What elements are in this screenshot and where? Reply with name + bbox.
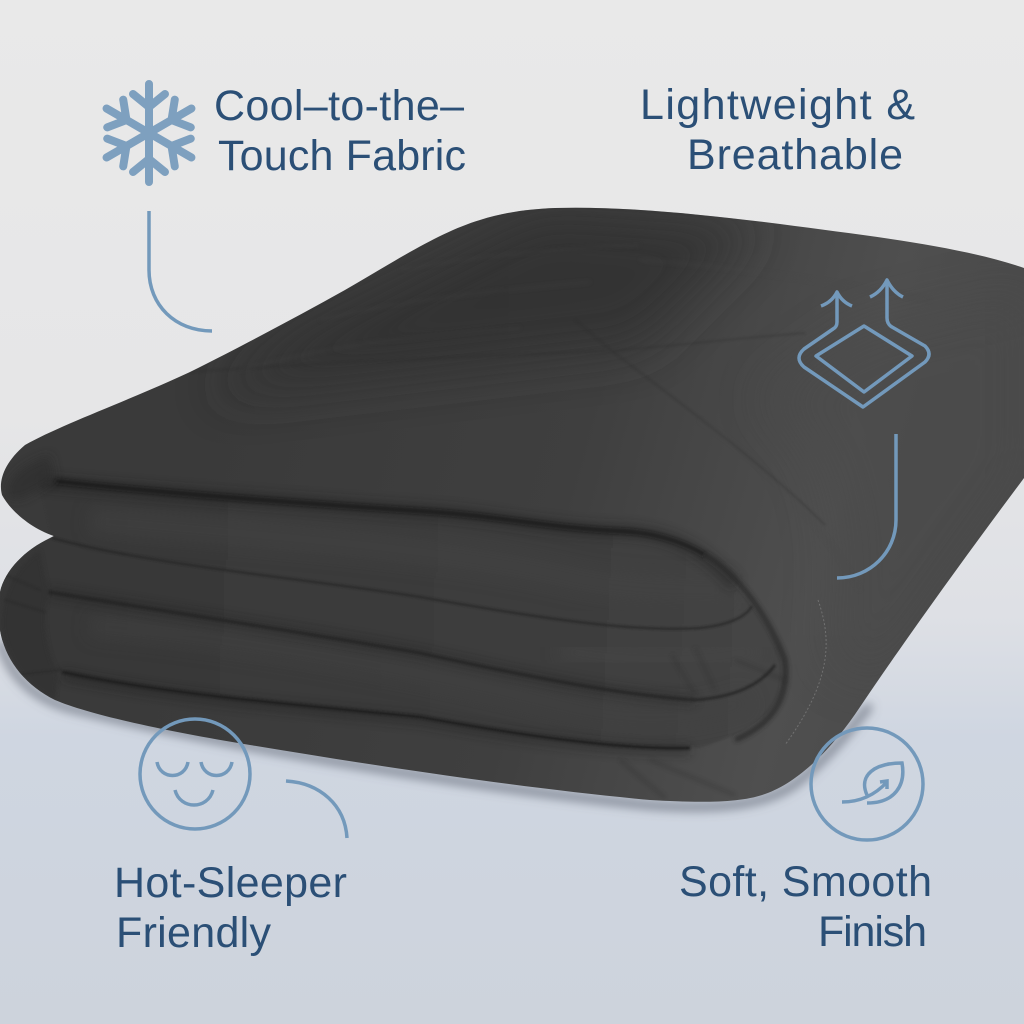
fold creases [55,481,705,555]
label: soft smooth finish: Finish [818,908,927,956]
left fold ends [11,462,48,494]
icon: snowflake [99,84,199,182]
connector line [286,781,347,838]
right side highlight [884,478,1024,671]
feature: cool-to-the-touch fabric [99,82,466,331]
icon: leaf in circle [811,728,923,840]
connector line [837,434,896,578]
icon: diamond layers with arrows [799,280,929,407]
label: cool-to-the-touch fabric: Touch Fabric [218,132,466,180]
roll highlights [90,520,730,590]
label: cool-to-the-touch fabric: Cool–to-the– [214,82,464,130]
inner rolls [0,534,781,747]
feature: lightweight and breathable [640,81,929,578]
quilting seams [190,320,825,525]
feature: hot-sleeper friendly [114,719,347,957]
label: hot-sleeper friendly: Friendly [116,909,272,957]
comforter contact shadow [0,640,870,807]
folded comforter [0,208,1024,802]
label: hot-sleeper friendly: Hot-Sleeper [114,859,347,907]
label: cool-to-the-touch fabric [214,82,466,180]
label: soft smooth finish: Soft, Smooth [679,858,932,906]
spiral folds at roll end [705,555,786,740]
connector line [149,211,212,331]
crease shadows [40,482,735,585]
icon: sleeping face [140,719,250,829]
label: soft smooth finish [679,858,932,956]
label: lightweight and breathable [640,81,915,179]
label: lightweight and breathable: Lightweight & [640,81,915,129]
feature: soft smooth finish [679,728,932,956]
label: hot-sleeper friendly [114,859,347,957]
stitching [785,600,826,745]
label: lightweight and breathable: Breathable [687,131,903,179]
top surface shading [248,208,753,364]
